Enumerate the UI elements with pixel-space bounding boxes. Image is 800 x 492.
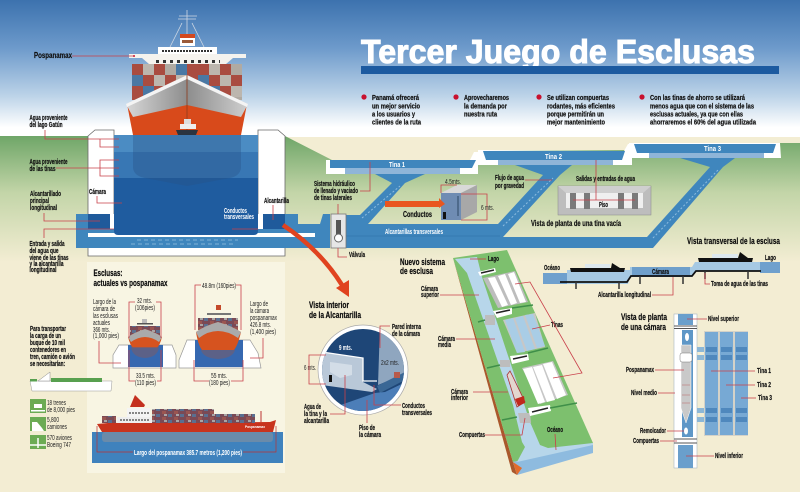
culvert interior circle [318, 325, 410, 420]
main lock cross-section [76, 130, 330, 256]
valve [331, 214, 365, 259]
lock diagram labels: Cámara [451, 389, 468, 396]
basin 1 [326, 152, 478, 183]
lock diagram labels: Cámara [421, 286, 438, 293]
text: transport comparison: la carga de un [30, 333, 61, 340]
valve: Válvula [349, 252, 365, 259]
culvert band and pipes [346, 167, 723, 248]
side-view ship: Pospanamax [245, 424, 266, 429]
circle labels: la tina y la [304, 411, 327, 418]
containers [132, 64, 242, 100]
title: Tercer Juego de Esclusas [361, 33, 755, 70]
label: chamber [89, 189, 122, 203]
ship silhouette high level [698, 252, 753, 262]
label: culvert: Alcantarilla [264, 198, 289, 205]
label: main culvert: principal [30, 198, 49, 205]
label: water from Gatun lake: Agua proveniente [30, 115, 68, 122]
basins and pipes system [326, 143, 781, 248]
big red arrow [283, 225, 349, 297]
basin names: Tina 2 [545, 154, 562, 161]
icon: trains: 18 trenes [47, 400, 66, 407]
large lock labels: (1,400 pies) [250, 329, 276, 336]
lock diagram labels: Compuertas [459, 432, 485, 439]
bullet: water savings: ahorraremos el 60% del agua utilizada [650, 120, 756, 126]
label: main culvert: longitudinal [30, 205, 57, 212]
chamber plan labels [626, 316, 772, 460]
underground conduit [76, 214, 330, 248]
large lock labels: 55 mts. [211, 373, 227, 380]
small lock labels: 32 mts. [137, 298, 152, 305]
chamber plan labels: Tina 1 [757, 368, 771, 375]
lock profile diagram: Océano [544, 265, 560, 272]
conduit orange arrow [385, 198, 445, 208]
icon: trucks: camiones [47, 424, 67, 431]
gate bars [478, 268, 551, 416]
terrain dividers [478, 305, 577, 420]
middle basins [503, 313, 545, 353]
lock profile diagram [543, 252, 780, 299]
bullet: better service: un mejor servicio [372, 104, 420, 110]
ocean front [513, 443, 593, 475]
label: transversal conduits: transversales [224, 214, 254, 221]
tugboat [176, 119, 198, 135]
ground [0, 136, 800, 492]
bullet: better service: Panamá ofrecerá [372, 95, 419, 102]
chamber plan labels: Pospanamax [626, 367, 654, 374]
label: water inlet and outlet [30, 229, 114, 274]
bullet: rolling gates: porque permitirán un [547, 112, 604, 118]
lock profile diagram: Alcantarilla longitudinal [598, 292, 651, 299]
lock diagram labels: Tinas [551, 322, 563, 329]
small lock labels [93, 298, 156, 387]
conduit 3D box: 6 mts. [481, 205, 494, 212]
small lock [113, 302, 176, 381]
large lock labels: la cámara [250, 308, 269, 315]
lock profile diagram: Cámara [652, 269, 669, 276]
icon: planes [30, 435, 72, 449]
small lock labels: actuales [93, 320, 110, 327]
basin 2 [478, 144, 632, 175]
bullet: demand: nuestra ruta [464, 112, 497, 118]
chamber plan diagram [674, 314, 748, 468]
empty basin plan view: Piso [599, 202, 608, 209]
ship in channel [507, 371, 525, 407]
bullet: better service [361, 94, 421, 126]
label: transversal conduits [224, 208, 258, 229]
lock diagram labels: Cámara [438, 336, 455, 343]
chamber gates [485, 315, 531, 423]
heading: locks comparison: Esclusas: [94, 268, 122, 279]
label: water from basins: Agua proveniente [30, 159, 68, 166]
label: main culvert [30, 191, 100, 221]
bullet: water savings: Con las tinas de ahorro se utilizará [650, 95, 745, 102]
bullet: rolling gates: mejor mantenimiento [547, 120, 605, 126]
conduit 3D box: 4.5mts. [445, 179, 461, 186]
label: water inlet and outlet: del agua que [30, 248, 59, 255]
label: water inlet and outlet: longitudinal [30, 267, 57, 274]
heading: new lock system: Nuevo sistema [400, 257, 445, 268]
bullet: water savings [639, 94, 756, 126]
sky background [0, 0, 800, 137]
heading: culvert interior [309, 300, 361, 321]
bullet: water savings: esclusas actuales, ya que con ellas [650, 112, 743, 118]
chamber plan labels: Tina 3 [758, 395, 772, 402]
label: hydraulic system [314, 162, 370, 214]
ship plan [680, 345, 692, 423]
bullet: water savings: menos agua que con el sistema de las [650, 104, 754, 110]
label: gravity flow: por gravedad [495, 183, 524, 190]
lock diagram labels: Océano [547, 427, 563, 434]
small lock labels: cámara de [93, 306, 115, 313]
side-view ship: Largo del pospanamax 385.7 metros (1,200 pies) [134, 450, 242, 457]
label: water outlets: Salidas y entradas de agua [576, 176, 635, 183]
upper basins [483, 271, 528, 308]
icon: trains [30, 399, 75, 414]
culvert interior circle: 2x2 mts. [381, 360, 399, 367]
heading: chamber plan view [621, 312, 667, 333]
icon: trains: de 8,000 pies [47, 407, 75, 414]
label: transversal conduits: Conductos [224, 208, 247, 215]
text: transport comparison: Para transportar [30, 326, 66, 333]
circle labels: Conductos [402, 403, 425, 410]
heading: culvert interior: Vista interior [309, 300, 349, 311]
underwater hull [133, 135, 241, 186]
bullet: demand [453, 94, 509, 118]
label: hydraulic system: Sistema hidráulico [314, 181, 355, 188]
text: transport comparison: se necesitarían: [30, 361, 65, 368]
circle labels: alcantarilla [304, 418, 329, 425]
icon: planes: 570 aviones [47, 435, 72, 442]
conduit label: Conductos [403, 209, 432, 219]
chamber plan labels: Nivel inferior [715, 453, 743, 460]
lock diagram labels: media [438, 342, 451, 349]
large lock labels: 426.8 mts. [250, 322, 271, 329]
label: water from Gatun lake [30, 115, 119, 147]
pipe dashes [362, 170, 718, 238]
chamber plan labels: Nivel medio [631, 390, 657, 397]
icon: planes: Boeing 747 [47, 442, 71, 449]
large lock labels: pospanamax [250, 315, 277, 322]
chamber plan labels: Nivel superior [708, 316, 739, 323]
ship silhouette low level [570, 263, 625, 272]
bullet: better service: a los usuarios y [372, 112, 415, 118]
lock diagram labels: Lago [488, 256, 499, 263]
isometric lock diagram [453, 250, 593, 475]
text: transport comparison: buque de 10 mil [30, 340, 65, 347]
conduit dashes [131, 240, 238, 244]
label: water from basins: de las tinas [30, 166, 56, 173]
label: water from Gatun lake: del lago Gatún [30, 122, 62, 129]
large lock labels: Largo de [250, 301, 268, 308]
text: transport comparison: contenedores en [30, 347, 66, 354]
label: culvert [264, 198, 289, 220]
basin names [389, 146, 721, 169]
bullet: demand: Aprovecharemos [464, 95, 509, 102]
text: transport comparison [30, 326, 75, 368]
chamber plan labels: Compuertas [633, 438, 659, 445]
heading: chamber plan view: de una cámara [621, 322, 666, 333]
lower basins [522, 361, 568, 404]
small lock labels: 366 mts. [93, 327, 110, 334]
small lock labels: las esclusas [93, 313, 118, 320]
lock diagram labels [421, 256, 582, 450]
label: water from basins [30, 159, 119, 176]
heading: locks comparison: actuales vs pospanamax [94, 278, 168, 289]
small lock labels: 33.5 mts. [136, 373, 155, 380]
small lock labels: Largo de la [93, 299, 116, 306]
funnel [180, 34, 195, 46]
side basins [697, 331, 748, 436]
large lock labels: 48.8m (160pies) [202, 283, 236, 290]
label: chamber: Cámara [89, 189, 106, 196]
heading: culvert interior: de la Alcantarilla [309, 310, 361, 321]
large lock labels: (180 pies) [209, 380, 230, 387]
small lock labels: (110 pies) [135, 380, 156, 387]
small ship silhouette [30, 372, 112, 391]
lock profile diagram: Lago [765, 255, 776, 262]
label: gravity flow: Flujo de agua [495, 175, 524, 182]
label: hydraulic system: de tinas laterales [314, 195, 352, 202]
lock profile diagram: Toma de agua de las tinas [711, 281, 768, 288]
circle labels: 6 mts. [304, 365, 316, 372]
small lock labels: (106pies) [135, 305, 155, 312]
mast [170, 10, 204, 47]
culvert label: Alcantarillas transversales [385, 229, 443, 236]
bullet: rolling gates: rodantes, más eficientes [547, 104, 615, 110]
bullet: rolling gates [536, 94, 615, 126]
large lock [179, 285, 261, 381]
label: Pospanamax: Pospanamax [34, 50, 72, 60]
small lock labels: (1,000 pies) [93, 333, 119, 340]
bullet: demand: la demanda por [464, 104, 507, 110]
culvert interior circle: 9 mts. [339, 345, 352, 352]
chamber plan labels: Remolcador [640, 428, 666, 435]
terrain top [453, 250, 593, 462]
basin names: Tina 3 [704, 146, 721, 153]
label: water inlet and outlet: y la alcantarilla [30, 261, 64, 268]
bullet: rolling gates: Se utilizan compuertas [547, 95, 609, 102]
heading: new lock system [400, 257, 445, 277]
chamber plan labels: Tina 2 [757, 382, 771, 389]
circle labels: transversales [402, 410, 432, 417]
heading: locks comparison [94, 268, 168, 289]
circle labels: de la cámara [392, 331, 420, 338]
circle labels: la cámara [359, 432, 381, 439]
tug boats [684, 333, 689, 434]
heading: chamber plan view: Vista de planta [621, 312, 667, 323]
label: water inlet and outlet: Entrada y salida [30, 241, 65, 248]
circle labels: Agua de [304, 404, 321, 411]
label: hydraulic system: de llenado y vaciado [314, 188, 358, 195]
label: Pospanamax [34, 50, 135, 60]
label: gravity flow [495, 175, 552, 190]
main channel [455, 257, 593, 462]
post-panamax ship bow view [126, 10, 248, 186]
terrain side [453, 258, 517, 475]
icon: trucks [30, 417, 67, 431]
empty basin plan view [558, 160, 651, 215]
bullet: better service: clientes de la ruta [372, 120, 421, 126]
circle labels: Pared interna [392, 324, 421, 331]
label: water inlet and outlet: viene de las tinas [30, 255, 69, 262]
circle labels [304, 324, 432, 439]
lock diagram labels: superior [421, 292, 439, 299]
panel: locks comparison [87, 262, 285, 473]
hull [126, 75, 248, 135]
lock diagram labels: inferior [451, 395, 468, 402]
conduit 3D box [441, 179, 494, 220]
large lock labels [202, 283, 277, 387]
side-view ship [92, 395, 283, 463]
icon: trucks: 5,800 [47, 417, 59, 424]
basin names: Tina 1 [389, 162, 405, 169]
heading: empty basin plan view: Vista de planta de una tina vacía [531, 218, 621, 228]
circle labels: Piso de [359, 425, 375, 432]
lock walls [88, 130, 285, 256]
text: transport comparison: tren, camión o avión [30, 354, 75, 361]
chamber water [114, 135, 258, 235]
basin 3 [629, 143, 781, 167]
heading: new lock system: de esclusa [400, 266, 433, 277]
bridge deck [129, 47, 246, 64]
label: main culvert: Alcantarillado [30, 191, 61, 198]
